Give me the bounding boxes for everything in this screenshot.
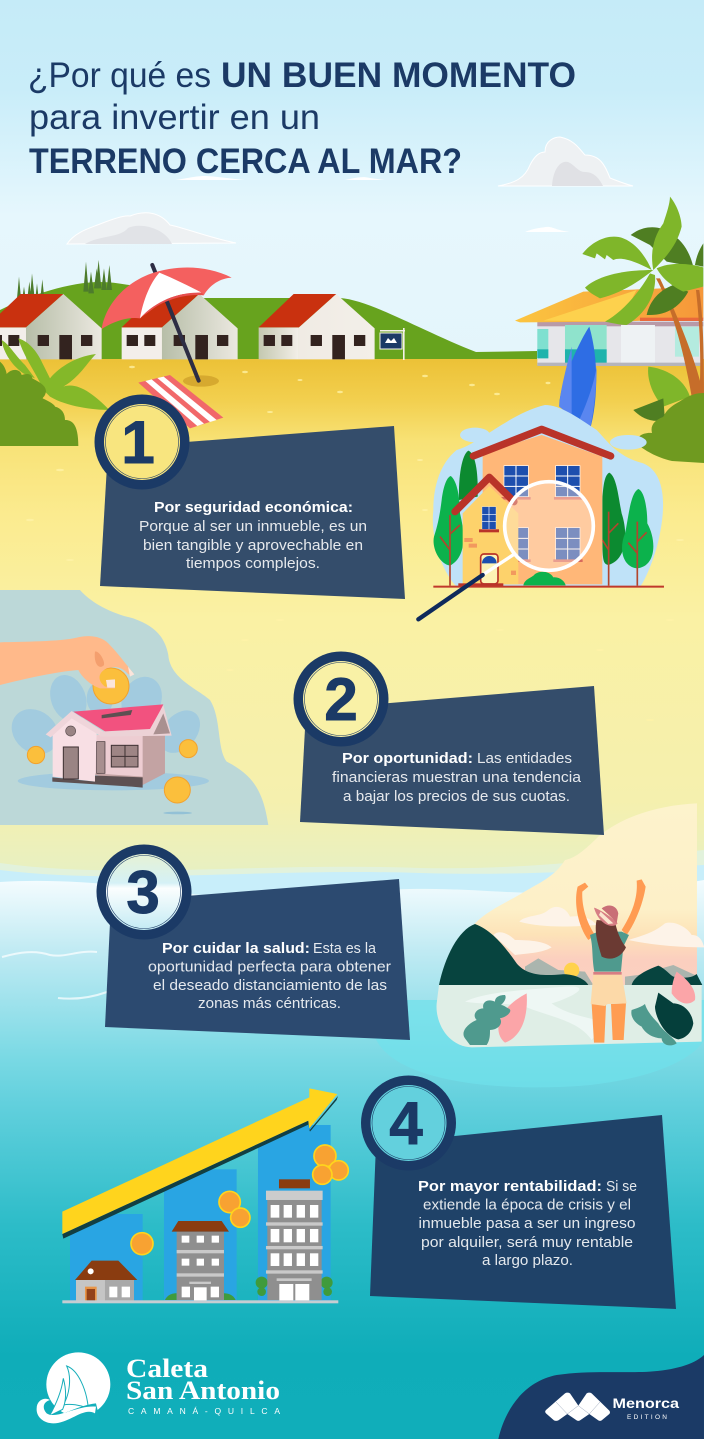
foam lines <box>2 952 107 999</box>
sea <box>0 850 704 1439</box>
title: para invertir en un <box>29 98 320 137</box>
small yellow house <box>463 486 518 584</box>
palm trunks <box>656 278 704 397</box>
trees <box>434 451 653 586</box>
water in scene <box>437 985 702 1047</box>
real estate sign <box>380 328 405 360</box>
panel 2 card <box>300 686 604 835</box>
grey-green blob <box>0 590 268 825</box>
surfboard <box>559 327 597 429</box>
panel 4 text <box>418 1179 637 1269</box>
leaves left <box>463 993 527 1045</box>
panel 1 text: Por seguridad económica: <box>154 500 353 516</box>
house 1 <box>0 294 102 359</box>
blue blob <box>433 405 663 587</box>
Caleta San Antonio logo: San Antonio <box>126 1376 280 1405</box>
title: ¿Por qué es <box>28 56 211 95</box>
coins <box>131 1145 348 1255</box>
title: UN BUEN MOMENTO <box>221 56 576 95</box>
mid-rise building <box>165 1221 236 1301</box>
clouds <box>493 907 704 955</box>
upper and lower windows <box>501 466 583 561</box>
blue leaves <box>3 670 209 790</box>
woman <box>576 879 646 1043</box>
pale water pool <box>375 1000 704 1087</box>
badge 3 <box>96 844 192 940</box>
ground line <box>433 586 664 588</box>
cream blob <box>440 803 697 985</box>
illustration: woman at sunset <box>437 803 704 1047</box>
beach house <box>515 287 703 366</box>
dark mountains <box>439 924 702 985</box>
logo icon <box>37 1352 110 1423</box>
cloud right <box>498 137 633 186</box>
badge 1: 1 <box>121 409 155 476</box>
distant mountains and sun <box>525 958 695 985</box>
tropical bush right <box>637 393 704 463</box>
badge 4: 4 <box>389 1090 423 1157</box>
panel 1 card <box>100 426 405 599</box>
magnifying glass <box>418 482 593 619</box>
beach umbrella <box>102 265 232 387</box>
hills <box>0 282 537 362</box>
palm tree <box>582 197 704 421</box>
sand speckles <box>26 366 684 721</box>
panel 3 text <box>148 941 391 1012</box>
beach towel <box>138 375 223 428</box>
house piggy bank <box>46 704 172 788</box>
badge 1 <box>94 394 190 490</box>
illustration: hand dropping coin in house <box>0 590 268 825</box>
rising arrow <box>62 1088 338 1239</box>
houses row <box>0 294 375 359</box>
panel 2 text <box>332 751 582 805</box>
panel 4 text: por alquiler, será muy rentable <box>421 1235 633 1251</box>
growth chart <box>62 1088 348 1303</box>
panel 4 text: Si se <box>606 1179 637 1195</box>
Menorca wordmark <box>612 1395 679 1421</box>
panel 4 card <box>370 1115 676 1309</box>
panel 1 text <box>139 500 367 572</box>
panel 3 card <box>105 879 410 1040</box>
bush <box>523 572 566 585</box>
badge 2: 2 <box>324 666 358 733</box>
panel 4 text: inmueble pasa a ser un ingreso <box>418 1216 636 1232</box>
panel 3 text: zonas más céntricas. <box>198 996 341 1012</box>
badge 4 <box>361 1076 456 1170</box>
blue bars <box>70 1125 331 1302</box>
badge 3: 3 <box>126 859 160 926</box>
falling coins <box>27 740 197 803</box>
Menorca wordmark: Menorca <box>612 1395 679 1411</box>
illustration: house with magnifying glass <box>418 405 664 619</box>
logo wordmark: Caleta <box>126 1354 208 1383</box>
panel 3 text: Por cuidar la salud: <box>162 941 310 957</box>
panel 3 text: Esta es la <box>313 941 377 957</box>
panel 3 text: oportunidad perfecta para obtener <box>148 960 391 976</box>
panel 4 text: a largo plazo. <box>482 1253 573 1269</box>
panel 1 text: tiempos complejos. <box>186 556 320 572</box>
Caleta San Antonio logo <box>37 1352 280 1423</box>
ground <box>62 1300 338 1303</box>
Menorca wordmark: EDITION <box>627 1414 667 1421</box>
panel 2 text: a bajar los precios de sus cuotas. <box>343 789 570 805</box>
small clouds <box>175 176 570 232</box>
house 2 <box>122 294 238 359</box>
panel 1 text: bien tangible y aprovechable en <box>143 538 363 554</box>
title <box>28 56 576 181</box>
cloud left <box>67 213 236 244</box>
main house <box>483 435 602 584</box>
hand and coin <box>0 636 134 704</box>
tropical bush left <box>0 338 109 446</box>
sky background <box>0 0 704 362</box>
tall building <box>256 1179 333 1301</box>
panel 2 text: financieras muestran una tendencia <box>332 770 582 786</box>
panel 2 text: Las entidades <box>477 751 572 767</box>
bright fronds <box>582 197 703 407</box>
badge 2 <box>294 652 388 746</box>
Caleta San Antonio logo: CAMANÁ-QUILCA <box>128 1406 280 1416</box>
sand beach <box>0 359 704 889</box>
panel 2 text: Por oportunidad: <box>342 751 473 767</box>
Menorca Edition corner <box>498 1355 704 1439</box>
panel 1 text: Porque al ser un inmueble, es un <box>139 519 367 535</box>
dark fronds <box>631 227 703 315</box>
pine trees <box>17 260 112 298</box>
panel 4 text: Por mayor rentabilidad: <box>418 1179 602 1195</box>
leaves right <box>631 972 695 1045</box>
Menorca logo mark <box>545 1393 610 1421</box>
house 3 <box>259 294 375 359</box>
panel 4 text: extiende la época de crisis y el <box>423 1198 631 1214</box>
title: TERRENO CERCA AL MAR? <box>29 142 462 181</box>
small house <box>75 1261 137 1301</box>
panel 3 text: el deseado distanciamiento de las <box>153 978 387 994</box>
